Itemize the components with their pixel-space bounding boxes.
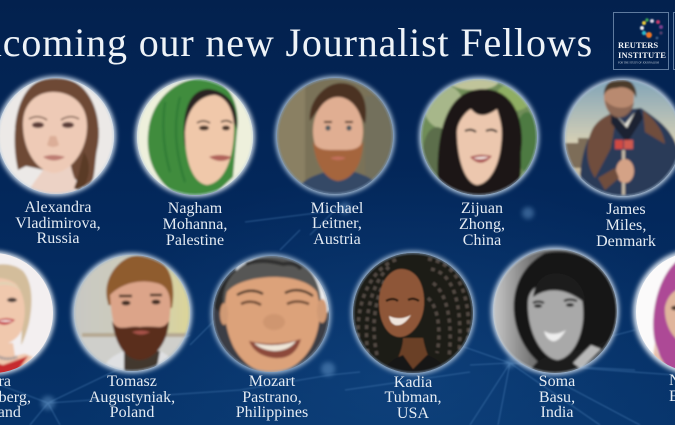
caption: Philippines xyxy=(236,404,308,421)
caption: Augustyniak, xyxy=(89,389,175,406)
caption: Denmark xyxy=(596,233,656,250)
caption xyxy=(459,200,505,249)
portrait: Soma Basu xyxy=(491,247,619,421)
caption: Tubman, xyxy=(384,389,442,406)
caption: Russia xyxy=(37,230,79,247)
network pattern xyxy=(0,205,675,425)
caption xyxy=(0,373,31,421)
logo: Reuters Institute xyxy=(614,12,668,70)
caption: Leitner, xyxy=(312,215,362,232)
caption: Vladimirova, xyxy=(15,215,101,232)
portrait: clipped fellow, bottom left xyxy=(0,251,55,421)
caption: India xyxy=(540,404,574,421)
portrait: Zijuan Zhong xyxy=(419,74,539,249)
caption xyxy=(669,372,675,405)
portrait: clipped fellow, bottom right xyxy=(633,249,675,405)
caption: Mohanna, xyxy=(163,216,227,233)
caption: Basu, xyxy=(539,389,575,406)
caption xyxy=(236,373,308,421)
caption: Zijuan xyxy=(461,200,503,217)
caption: Austria xyxy=(313,231,361,248)
caption: Zhong, xyxy=(459,216,505,233)
logo dot ring xyxy=(640,18,663,39)
caption xyxy=(89,373,175,421)
caption: Nagham xyxy=(168,200,223,217)
caption xyxy=(15,199,101,247)
portrait: James Miles xyxy=(563,77,675,250)
caption: Poland xyxy=(110,404,154,421)
caption: China xyxy=(463,232,501,249)
portrait: Nagham Mohanna xyxy=(135,77,255,249)
caption xyxy=(163,200,227,249)
portrait: Mozart Pastrano xyxy=(211,254,331,421)
caption: Miles, xyxy=(606,217,646,234)
caption xyxy=(539,373,575,421)
logo: Reuters Institute: INSTITUTE xyxy=(618,50,666,60)
portrait: Michael Leitner xyxy=(275,76,395,248)
logo: Reuters Institute: FOR THE STUDY OF JOURNALISM xyxy=(618,62,660,64)
caption: Soma xyxy=(539,373,575,390)
caption: Alexandra xyxy=(24,199,92,216)
portrait: Kadia Tubman xyxy=(351,251,475,422)
logo wordmark: REUTERS xyxy=(618,40,658,50)
logo: second box xyxy=(674,12,675,70)
portrait: Alexandra Vladimirova xyxy=(0,76,116,247)
caption: James xyxy=(606,201,646,218)
caption: Kadia xyxy=(394,374,432,391)
caption: Pastrano, xyxy=(242,389,302,406)
caption: Palestine xyxy=(166,232,224,249)
portrait: Tomasz Augustyniak xyxy=(72,253,192,421)
caption: Michael xyxy=(311,200,364,217)
caption: Mozart xyxy=(249,373,296,390)
caption xyxy=(311,200,364,248)
caption xyxy=(384,374,442,422)
caption: Tomasz xyxy=(107,373,157,390)
network nodes xyxy=(41,202,534,410)
caption xyxy=(596,201,656,250)
caption: USA xyxy=(397,405,429,422)
